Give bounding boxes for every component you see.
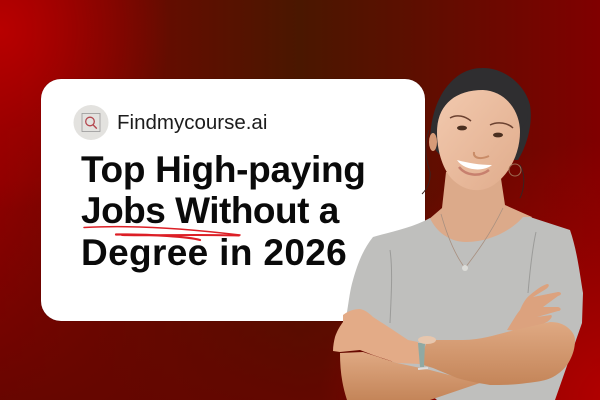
loose hair strands xyxy=(422,130,524,198)
face xyxy=(437,90,520,190)
hair top xyxy=(436,69,528,128)
brand name: Findmycourse.ai xyxy=(117,111,267,134)
neck and chest xyxy=(428,172,532,252)
earring xyxy=(509,164,521,176)
heading line 1: Top High-paying xyxy=(81,148,366,190)
main forearm xyxy=(420,322,575,385)
far forearm xyxy=(340,352,480,400)
t-shirt xyxy=(347,217,583,400)
shirt shadow folds xyxy=(390,232,536,323)
right hand xyxy=(507,284,561,332)
heading line 2: Jobs Without a xyxy=(81,190,339,231)
nose xyxy=(474,152,489,158)
brows xyxy=(450,116,513,128)
heading line 3: Degree in 2026 xyxy=(81,232,347,273)
watch xyxy=(418,343,425,367)
necklace xyxy=(441,208,503,268)
left hand xyxy=(333,309,420,364)
eyes xyxy=(457,126,467,130)
hair back xyxy=(430,68,531,160)
ear xyxy=(429,133,437,151)
panel: white title card xyxy=(41,79,425,321)
smile xyxy=(457,160,492,169)
